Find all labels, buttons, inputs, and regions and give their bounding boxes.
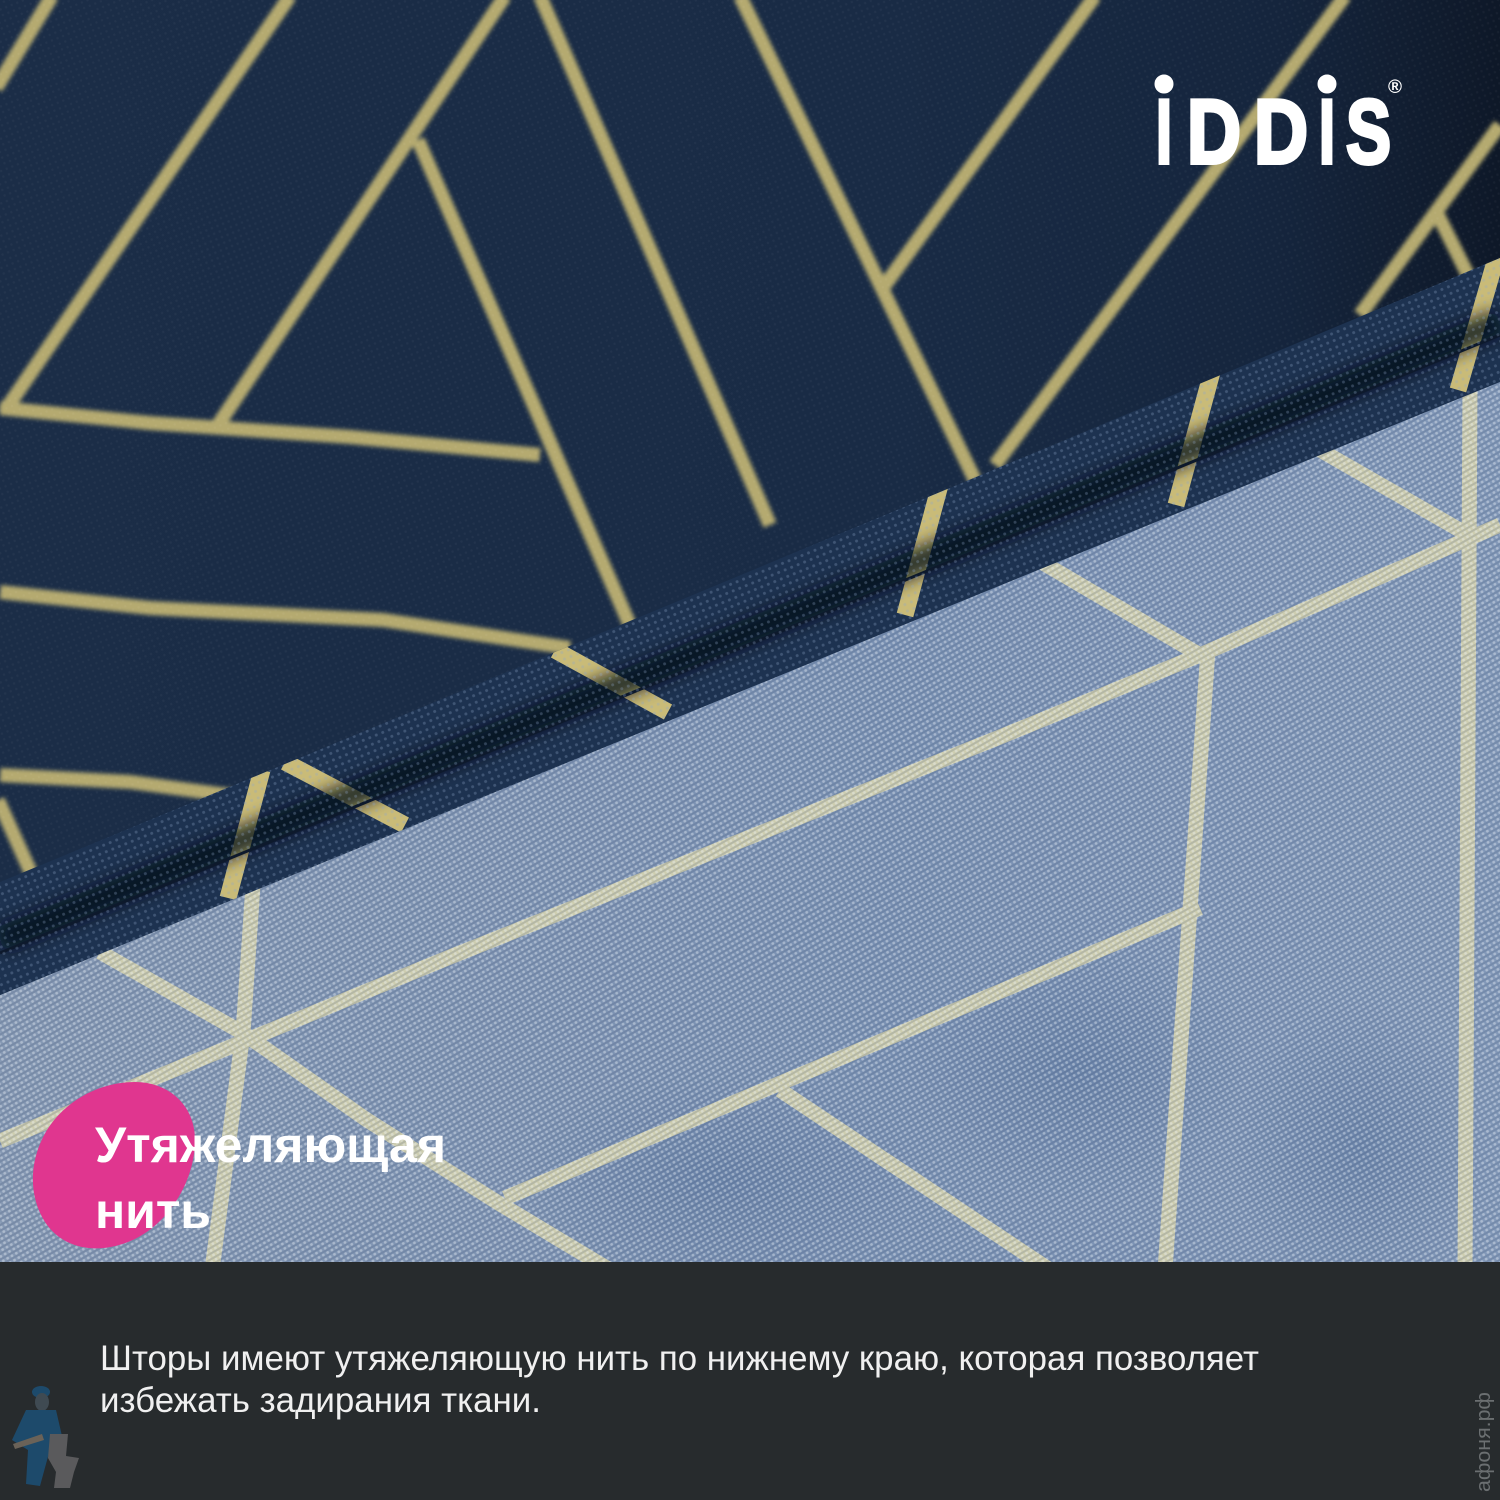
heading badge: pink blob <box>33 1082 195 1248</box>
description text: избежать задирания ткани. <box>100 1381 541 1420</box>
icon: plumber with toilet <box>12 1386 79 1488</box>
hem shadow under roll <box>0 322 1500 940</box>
heading: нить <box>95 1183 211 1239</box>
logo: iDDiS: I <box>1319 82 1335 183</box>
panel: hem with weighting thread <box>0 250 1500 1010</box>
bottom bar background <box>0 1262 1500 1500</box>
logo: iDDiS: D <box>1187 82 1241 183</box>
logo: iDDiS: S <box>1346 82 1391 183</box>
heading: Утяжеляющая <box>95 1117 446 1173</box>
logo: iDDiS: I <box>1156 82 1172 183</box>
panel: light reverse side of fabric <box>0 370 1500 1300</box>
watermark: афоня.рф <box>1473 1392 1495 1492</box>
panel: navy curtain fabric <box>0 0 1500 1000</box>
hem stitch line <box>0 335 1500 953</box>
logo: iDDiS: D <box>1254 82 1308 183</box>
logo: iDDiS <box>1155 75 1402 183</box>
gold geometric lines on navy fabric <box>0 0 1500 875</box>
logo: iDDiS: ® <box>1388 77 1402 98</box>
cream geometric lines on light fabric <box>0 385 1500 1270</box>
description text: Шторы имеют утяжеляющую нить по нижнему краю, которая позволяет <box>100 1339 1259 1378</box>
hem gold stripes <box>228 255 1497 898</box>
